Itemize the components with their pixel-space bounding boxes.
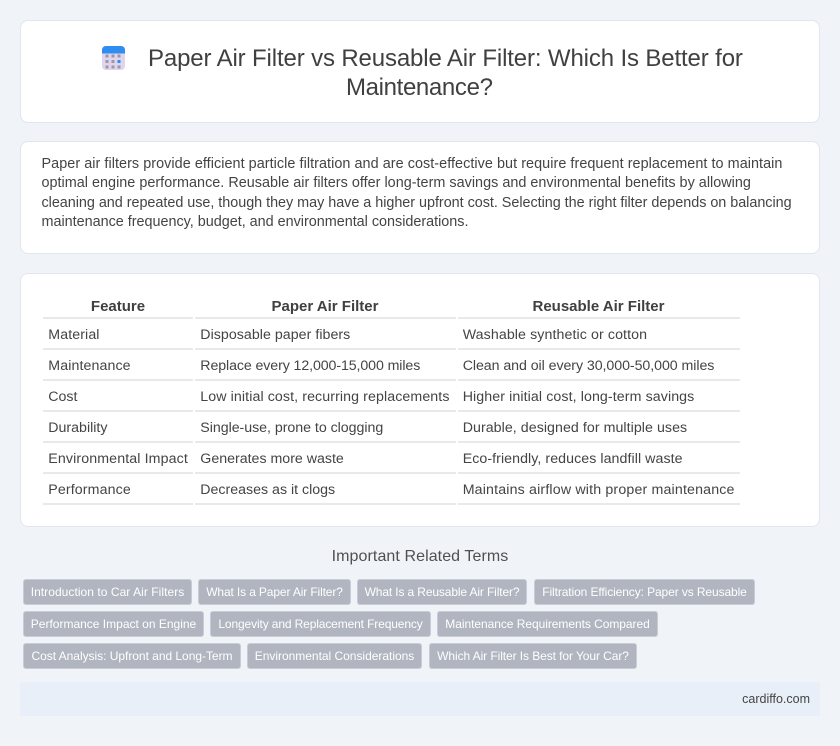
comparison table: Feature	[91, 298, 145, 315]
related term tags	[23, 579, 755, 669]
comparison table: Cost	[48, 389, 77, 405]
summary text	[42, 156, 792, 230]
related term tags: Filtration Efficiency: Paper vs Reusable	[542, 585, 747, 599]
comparison table: Durability	[48, 420, 107, 436]
title: Paper Air Filter vs Reusable Air Filter: Which Is Better for	[148, 45, 743, 72]
related term tags: Performance Impact on Engine	[31, 617, 196, 631]
related term tags: Cost Analysis: Upfront and Long-Term	[31, 649, 233, 663]
comparison table: Eco-friendly, reduces landfill waste	[463, 451, 683, 467]
comparison table: Washable synthetic or cotton	[463, 327, 647, 343]
related term tags: What Is a Reusable Air Filter?	[365, 585, 519, 599]
comparison table: Single-use, prone to clogging	[200, 420, 383, 436]
comparison table	[43, 298, 740, 505]
footer credit: cardiffo.com	[742, 692, 810, 706]
comparison table: Performance	[48, 482, 131, 498]
comparison table: Higher initial cost, long-term savings	[463, 389, 694, 405]
related term tags: Introduction to Car Air Filters	[31, 585, 184, 599]
comparison table: Durable, designed for multiple uses	[463, 420, 687, 436]
comparison table: Generates more waste	[200, 451, 344, 467]
title	[148, 45, 743, 101]
related term tags: Environmental Considerations	[255, 649, 414, 663]
comparison table: Decreases as it clogs	[200, 482, 335, 498]
icon: calendar	[102, 46, 125, 70]
comparison table: Reusable Air Filter	[532, 298, 664, 315]
comparison table: Low initial cost, recurring replacements	[200, 389, 450, 405]
panel: summary card	[20, 141, 820, 254]
summary text: Paper air filters provide efficient particle filtration and are cost-effective but require frequent replacement to maintain	[42, 156, 782, 172]
comparison table: Disposable paper fibers	[200, 327, 350, 343]
panel: title card	[20, 20, 820, 123]
related term tags: Longevity and Replacement Frequency	[218, 617, 423, 631]
panel: comparison table card	[20, 273, 820, 527]
comparison table: Environmental Impact	[48, 451, 188, 467]
related term tags: Which Air Filter Is Best for Your Car?	[437, 649, 629, 663]
comparison table: Maintains airflow with proper maintenance	[463, 482, 735, 498]
related term tags: Maintenance Requirements Compared	[445, 617, 650, 631]
comparison table: Replace every 12,000-15,000 miles	[200, 358, 420, 374]
comparison table: Clean and oil every 30,000-50,000 miles	[463, 358, 714, 374]
summary text: cleaning and repeated use, though they may have a higher upfront cost. Selecting the right filter depends on balancing	[42, 195, 792, 211]
heading: important related terms: Important Related Terms	[332, 548, 508, 565]
related term tags: What Is a Paper Air Filter?	[206, 585, 343, 599]
title: Maintenance?	[346, 74, 493, 101]
summary text: optimal engine performance. Reusable air filters offer long-term savings and environmental benefits by allowing	[42, 175, 751, 191]
footer bar	[20, 682, 820, 716]
comparison table: Paper Air Filter	[272, 298, 378, 315]
summary text: maintenance frequency, budget, and environmental considerations.	[42, 214, 468, 230]
comparison table: Material	[48, 327, 100, 343]
comparison table: Maintenance	[48, 358, 131, 374]
